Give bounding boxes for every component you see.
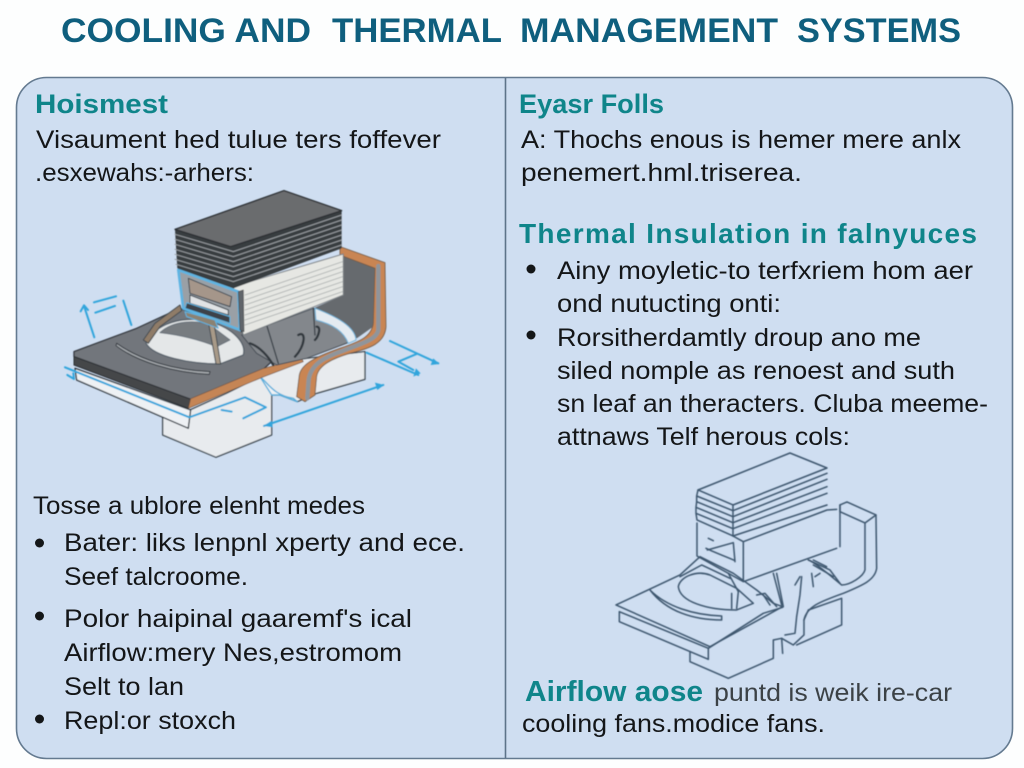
- dome: [146, 319, 244, 364]
- airflow text: puntd is weik ire-car: [714, 679, 952, 707]
- intro text: .esxewahs:-arhers:: [35, 159, 254, 187]
- title: THERMAL: [332, 12, 502, 50]
- base block: [163, 352, 365, 457]
- airflow text: cooling fans.modice fans.: [522, 710, 825, 738]
- top fin: [175, 191, 342, 247]
- stacked fins: [175, 191, 342, 288]
- heading: Hoismest: Hoismest: [35, 89, 168, 119]
- airflow section: [522, 676, 952, 738]
- central support: [242, 308, 355, 365]
- intro text: [521, 126, 962, 187]
- base plate side: [74, 357, 191, 408]
- left bottom list: [33, 492, 465, 735]
- bullet list: insulation: sn leaf an theracters. Cluba meeme-: [557, 390, 988, 418]
- illustration: colored heat sink: [65, 191, 439, 457]
- bullet list: methods: Bater: liks lenpnl xperty and ece.: [64, 529, 465, 557]
- base plate groove: [116, 343, 210, 374]
- right column: intro: [519, 89, 962, 187]
- white duct curve: [315, 308, 356, 343]
- title: MANAGEMENT: [520, 12, 778, 50]
- bullet list: insulation: Ainy moyletic-to terfxriem hom aer: [557, 257, 973, 285]
- bullet list: methods: Selt to lan: [64, 673, 184, 701]
- illustration: line drawing heat sink: [616, 453, 877, 678]
- intro text: penemert.hml.triserea.: [521, 159, 802, 187]
- bullet list: methods: Repl:or stoxch: [64, 707, 236, 735]
- rear duct interior: [313, 255, 375, 338]
- base plate top: [74, 308, 273, 399]
- list heading: Tosse a ublore elenht medes: [33, 492, 365, 520]
- intro text: A: Thochs enous is hemer mere anlx: [521, 126, 962, 154]
- title: SYSTEMS: [797, 12, 961, 50]
- panel divider: [504, 78, 506, 758]
- title: COOLING AND: [61, 12, 311, 50]
- section: Thermal Insulation: [519, 218, 988, 451]
- heading: Eyasr Folls: Eyasr Folls: [519, 89, 664, 119]
- duct and base outline: [690, 502, 877, 678]
- stacked fins outline: [698, 453, 827, 505]
- bullet list: insulation: Rorsitherdamtly droup ano me: [557, 324, 921, 352]
- copper plate edge: [188, 358, 303, 408]
- bullet list: methods: Polor haipinal gaaremf's ical: [64, 605, 412, 633]
- plate outline: [616, 557, 783, 647]
- bullet list: insulation: ond nutucting onti:: [557, 290, 781, 318]
- airflow text: [522, 679, 952, 738]
- heading: Thermal Insulation: Thermal Insulation in falnyuces: [519, 218, 977, 249]
- white connector gap: [260, 377, 297, 402]
- bullet list: insulation: siled nomple as renoest and suth: [557, 357, 955, 385]
- fin body: [233, 254, 343, 335]
- title: [61, 12, 961, 50]
- bullet list: methods: Seef talcroome.: [64, 563, 248, 591]
- electronics window: [178, 270, 240, 330]
- left column: intro: [35, 89, 441, 187]
- intro text: Visaument hed tulue ters foffever: [36, 126, 441, 154]
- bullet list: methods: Airflow:mery Nes,estromom: [64, 639, 402, 667]
- copper heat pipe: [297, 247, 386, 402]
- pipe center stripe: [307, 266, 378, 398]
- bullet list: methods: [35, 529, 465, 735]
- intro text: [35, 126, 441, 187]
- body outline: [697, 509, 837, 582]
- blue flow arrows: [65, 296, 438, 426]
- heading: Airflow: Airflow aose: [525, 676, 703, 708]
- lower plate strip: [75, 368, 191, 428]
- bullet list: insulation: attnaws Telf herous cols:: [557, 423, 850, 451]
- bullet list: insulation: [526, 257, 988, 451]
- struts: [143, 305, 182, 343]
